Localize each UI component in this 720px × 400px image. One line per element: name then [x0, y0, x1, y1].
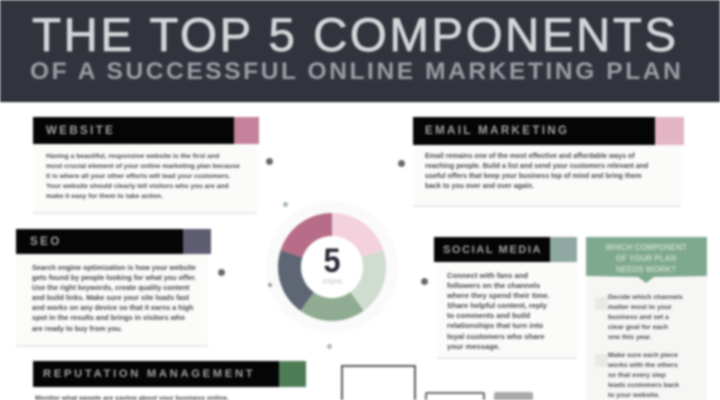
body text: seo	[30, 263, 197, 334]
body text: seo: Search engine optimization is how your website	[32, 263, 196, 272]
sidebar text two: so that every step	[608, 372, 666, 379]
banner: sidebar heading: WHICH COMPONENT	[605, 243, 687, 252]
body text: website: most crucial element of your online marketing plan because	[46, 163, 240, 170]
sidebar text one	[606, 293, 684, 342]
body text: social media: your message.	[447, 342, 500, 351]
heading bar: email marketing: EMAIL MARKETING	[425, 125, 569, 137]
sidebar text one: clear goal for each	[608, 324, 668, 331]
number five: 5	[324, 242, 340, 280]
sidebar text two	[606, 351, 680, 400]
body text: seo: spot in the results and brings in visitors who	[32, 313, 185, 322]
sidebar text one: matter most to your	[608, 304, 672, 311]
body text: website: Your website should clearly tell visitors who you are and	[46, 183, 229, 190]
header band	[0, 0, 720, 102]
text card: seo	[16, 254, 208, 347]
panel: social media	[432, 235, 578, 360]
sidebar text one: Decide which channels	[608, 294, 683, 301]
chart: central five-part ring	[276, 211, 388, 323]
sidebar text two: works with the others	[608, 362, 678, 369]
heading bar: reputation management	[33, 361, 306, 387]
banner: sidebar heading: OF YOUR PLAN	[616, 254, 676, 263]
body text: seo: gets found by people looking for what you offer.	[32, 273, 196, 282]
body text: seo: and build links. Make sure your site loads fast	[32, 293, 189, 302]
body text: email marketing: reaching people. Build a list and send your customers relevant and	[425, 163, 648, 170]
ring caption: STEPS	[322, 280, 342, 286]
banner: sidebar heading	[584, 236, 708, 284]
body text: social media	[446, 271, 550, 352]
body text: social media: followers on the channels	[447, 281, 540, 290]
body text: email marketing: useful offers that keep your business top of mind and bring them	[425, 173, 642, 180]
body text: email marketing: back to you over and over again.	[425, 183, 534, 190]
heading bar: social media	[434, 237, 577, 262]
body text: email marketing: Email remains one of the most effective and affordable ways of	[425, 153, 635, 160]
sidebar text two: leads customers back	[608, 382, 679, 389]
bottom outlined box	[341, 365, 416, 400]
body text: email marketing	[424, 151, 650, 191]
panel: reputation management	[31, 359, 308, 400]
title: THE TOP 5 COMPONENTS	[32, 9, 679, 62]
body text: social media: to comments and build	[447, 311, 530, 320]
panel: website	[31, 115, 260, 214]
bottom gray box	[494, 392, 533, 400]
sidebar text two: to your website.	[608, 392, 660, 399]
body text: seo: Use the right keywords, create quality content	[32, 283, 189, 292]
subtitle: OF A SUCCESSFUL ONLINE MARKETING PLAN	[30, 58, 683, 85]
heading bar: seo: SEO	[30, 236, 62, 248]
panel: email marketing	[411, 115, 686, 208]
banner: sidebar heading: NEEDS WORK?	[616, 265, 676, 274]
heading bar: website: WEBSITE	[46, 124, 115, 136]
body text: social media: where they spend their time.	[447, 291, 550, 300]
body text: social media: Share helpful content, reply	[447, 301, 547, 310]
body text: website: it is where all your other efforts will lead your customers.	[46, 173, 230, 180]
heading bar: reputation management: REPUTATION MANAGEMENT	[43, 368, 255, 380]
icon: sidebar bullet one	[595, 297, 608, 310]
text card: email marketing	[413, 145, 681, 207]
body text: website: Having a beautiful, responsive website is the first and	[46, 153, 219, 160]
bottom small outlined box	[425, 392, 485, 400]
heading bar: email marketing	[413, 117, 684, 145]
body text: seo: and works on any device so that it earns a high	[32, 303, 193, 312]
body text: social media: relationships that turn into	[447, 321, 543, 330]
body text: seo: are ready to buy from you.	[32, 324, 122, 333]
sidebar text two: Make sure each piece	[608, 352, 678, 359]
heading bar: social media: SOCIAL MEDIA	[443, 244, 542, 256]
sidebar text one: business and set a	[608, 314, 669, 321]
heading bar: website	[33, 117, 259, 144]
text card: social media	[437, 262, 577, 359]
heading bar: seo	[16, 229, 211, 254]
text card: website	[33, 144, 257, 214]
body text: social media: Connect with fans and	[447, 271, 528, 280]
panel: seo	[14, 227, 212, 348]
body text: website: make it easy for them to take action.	[46, 193, 163, 200]
body text: social media: loyal customers who share	[447, 332, 544, 341]
body text: website	[44, 152, 241, 201]
icon: sidebar bullet two	[595, 354, 608, 367]
sidebar text one: one this year.	[608, 334, 651, 341]
panel: green sidebar	[586, 237, 707, 400]
